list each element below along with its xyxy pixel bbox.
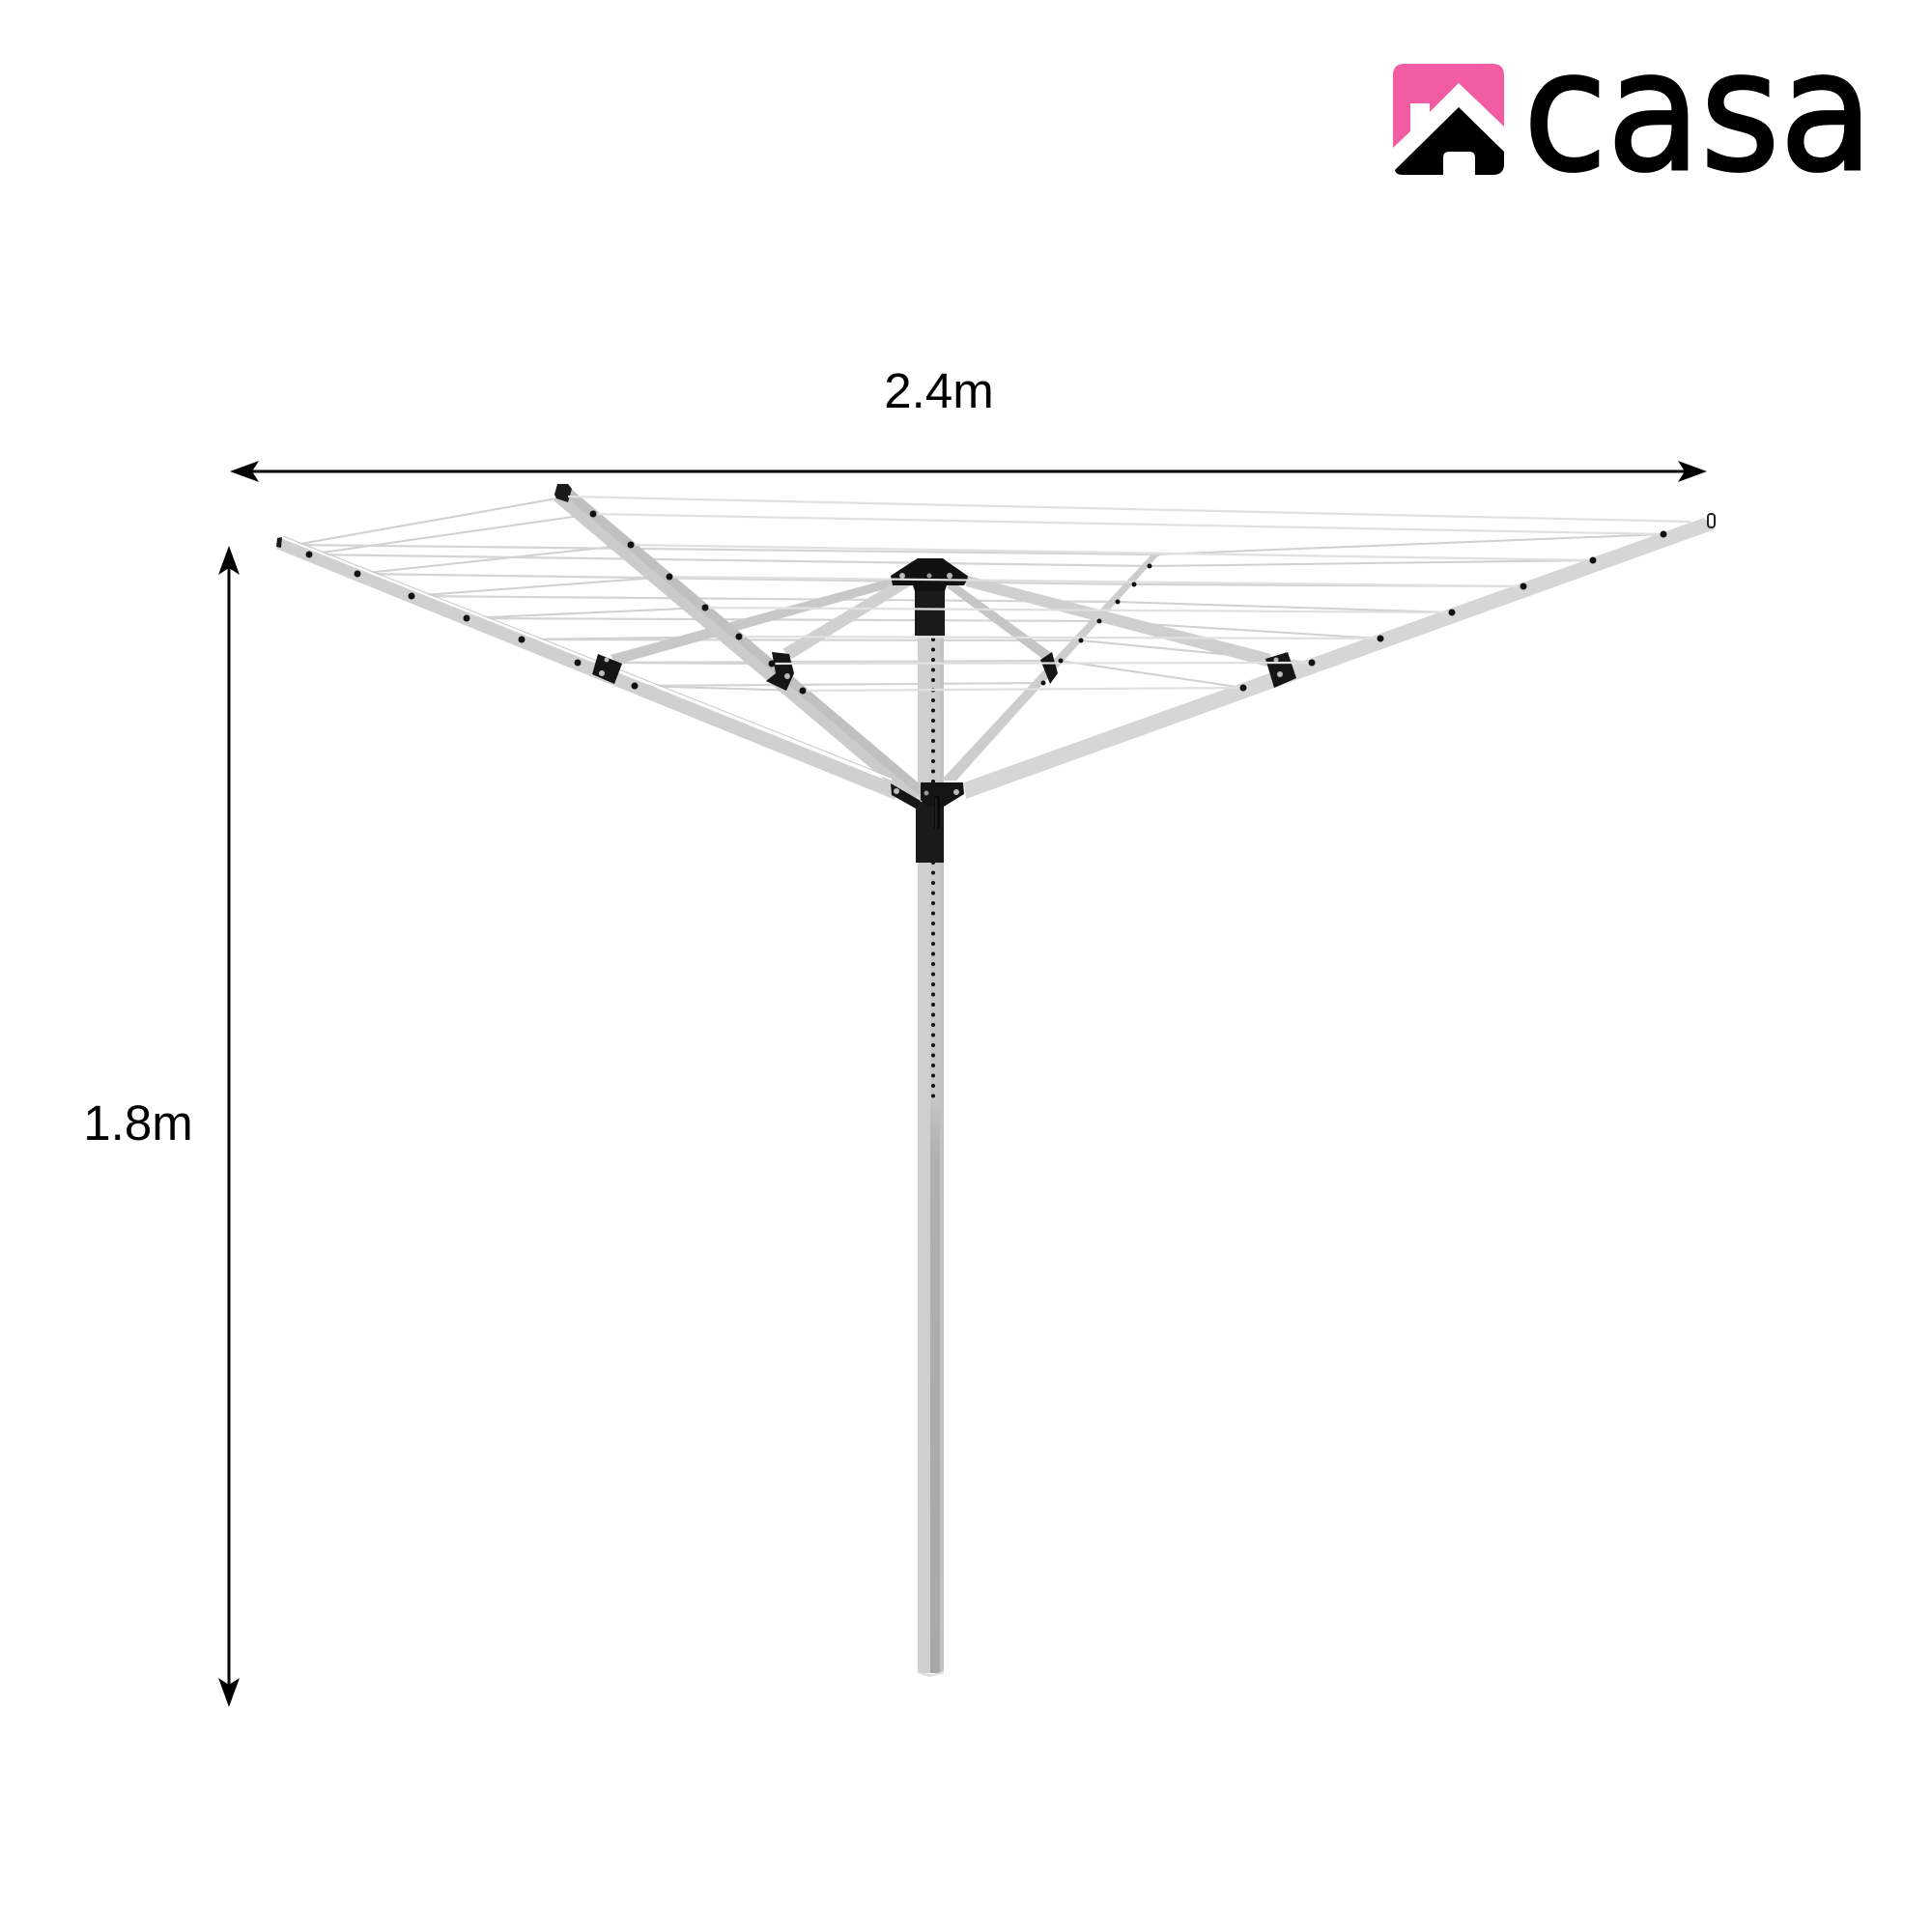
pegs on arms [305,510,1667,694]
lines: left to back right [295,545,1155,686]
width label: 2.4m [884,363,994,418]
arm: back left [554,488,923,804]
logo: casa [1393,14,1873,209]
logo icon: black house [1395,107,1504,175]
arrow: width dimension [230,461,1707,482]
bracket: left [592,654,622,684]
lines: back left to right [568,497,1690,691]
bracket: back left [766,652,794,691]
strut: back left [782,570,923,659]
strut: back right [947,582,1053,661]
logo icon: pink square [1393,64,1504,148]
lines: left to back left [295,497,803,691]
bracket: right [1265,652,1296,688]
rotary clothes line [276,484,1715,1677]
base hub and sleeve [891,782,964,863]
arm: back right [941,554,1160,781]
tip caps [276,484,1715,556]
lines: back right to right [1061,534,1663,688]
bracket: back right [1040,652,1058,684]
height label: 1.8m [83,1095,193,1151]
arrow: height dimension [218,546,240,1707]
pole [918,580,944,1677]
top hub [891,558,969,636]
logo wordmark: casa [1523,14,1873,209]
strut: right [966,576,1271,667]
arm: right [964,518,1715,799]
strut: left [611,578,898,665]
arm: left [276,536,895,800]
